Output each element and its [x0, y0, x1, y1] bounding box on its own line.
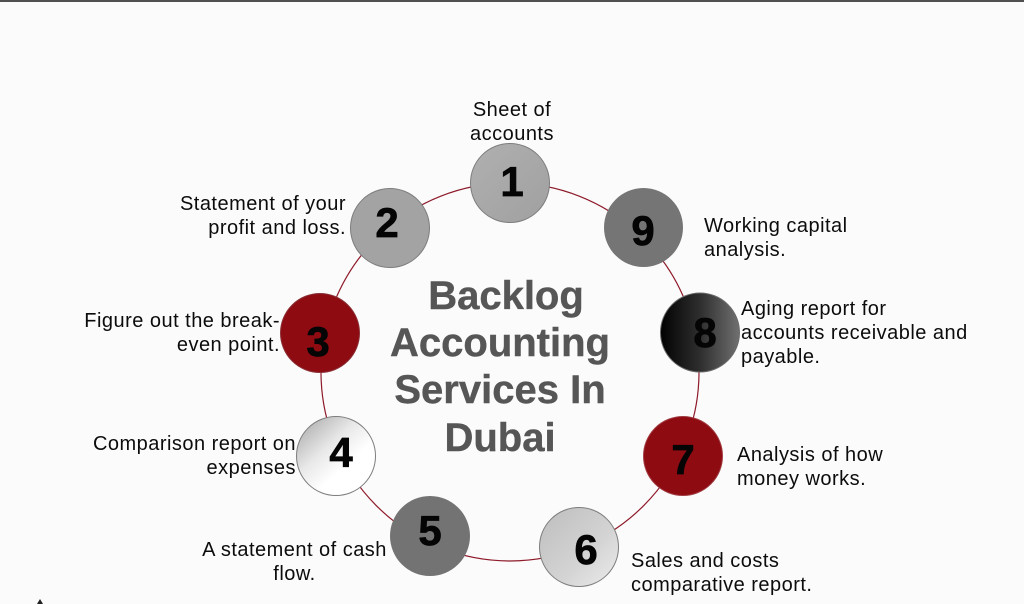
label 4: expenses — [207, 457, 296, 479]
step 8 circle: 8 — [693, 309, 717, 356]
label 3: even point. — [177, 334, 280, 356]
step 7 circle — [644, 416, 722, 496]
label 2 — [180, 193, 346, 239]
label 7: money works. — [737, 468, 866, 490]
step 8 circle — [660, 293, 740, 372]
title: Dubai — [444, 416, 556, 460]
label 6: Sales and costs — [631, 550, 779, 572]
step 6 circle: 6 — [574, 526, 598, 573]
title: Services In — [394, 368, 606, 412]
label 1: accounts — [470, 123, 554, 145]
step 2 circle: 2 — [375, 199, 399, 246]
label 8: accounts receivable and — [741, 322, 968, 344]
step 4 circle — [296, 416, 376, 496]
label 6 — [631, 550, 812, 596]
label 7 — [737, 444, 883, 490]
label 4 — [93, 433, 296, 479]
step 5 circle — [390, 496, 470, 576]
step 4 circle: 4 — [329, 429, 353, 476]
step 2 circle — [350, 188, 430, 268]
step 3 circle — [280, 294, 360, 372]
label 3 — [84, 310, 280, 356]
title — [390, 274, 610, 460]
step 1 circle: 1 — [500, 158, 524, 205]
label 8 — [741, 298, 968, 368]
connecting ring — [321, 183, 699, 561]
title: Backlog — [428, 274, 584, 318]
title: Accounting — [390, 321, 610, 365]
label 3: Figure out the break- — [84, 310, 280, 332]
label 8: payable. — [741, 346, 820, 368]
label 4: Comparison report on — [93, 433, 296, 455]
step 5 circle: 5 — [418, 507, 442, 554]
label 5 — [202, 539, 387, 585]
step 3 circle: 3 — [306, 318, 330, 365]
label 9: Working capital — [704, 215, 848, 237]
label 5: A statement of cash — [202, 539, 387, 561]
label 9: analysis. — [704, 239, 786, 261]
label 1 — [470, 99, 554, 145]
step 9 circle — [604, 188, 683, 267]
step 1 circle — [470, 144, 550, 222]
cropped mark at bottom edge — [37, 599, 43, 604]
label 1: Sheet of — [473, 99, 551, 121]
label 6: comparative report. — [631, 574, 812, 596]
top edge bar — [0, 0, 1024, 2]
label 8: Aging report for — [741, 298, 887, 320]
step 9 circle: 9 — [631, 207, 655, 254]
step 6 circle — [540, 508, 618, 586]
step 7 circle: 7 — [671, 436, 695, 483]
label 2: profit and loss. — [208, 217, 346, 239]
label 7: Analysis of how — [737, 444, 883, 466]
label 2: Statement of your — [180, 193, 346, 215]
label 5: flow. — [273, 563, 316, 585]
label 9 — [704, 215, 848, 261]
